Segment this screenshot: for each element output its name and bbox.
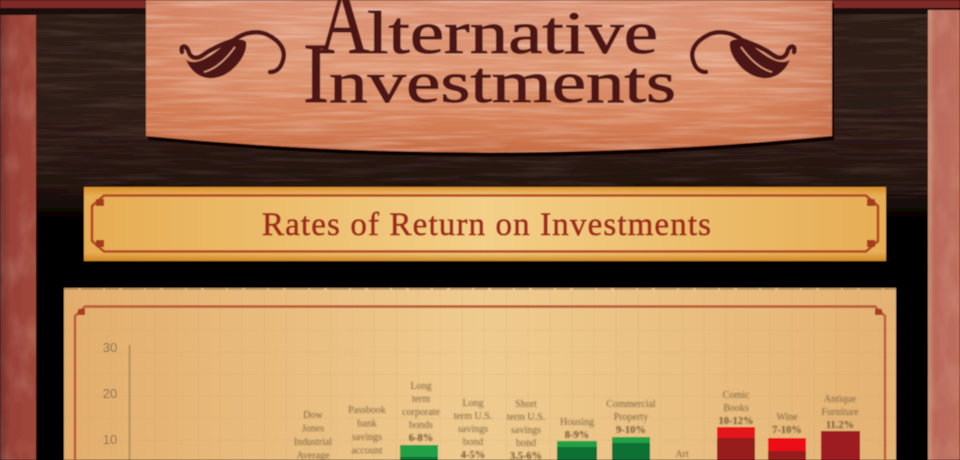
title: I	[303, 25, 329, 121]
panel: title plank	[146, 0, 834, 156]
label: Passbook: savings	[352, 432, 382, 443]
top beam	[0, 0, 960, 14]
label: short-term savings bond: savings	[511, 425, 541, 436]
icon: right flourish	[692, 32, 794, 78]
label: Passbook: Passbook	[348, 405, 386, 416]
label: corporate bonds: corporate	[402, 407, 440, 418]
label: corporate bonds: Long	[410, 381, 432, 392]
label: corporate bonds: 6-8%	[409, 433, 433, 444]
label: antique furniture: Antique	[824, 394, 857, 405]
title: lternative	[367, 0, 658, 66]
label: wine: 7-10%	[772, 425, 802, 436]
chart: y axis: 30	[103, 340, 117, 355]
label: comic books: Books	[723, 403, 749, 414]
label: corporate bonds: bonds	[409, 420, 433, 431]
bar: comic books	[717, 427, 755, 460]
label: antique furniture: Furniture	[821, 407, 859, 418]
label: short-term savings bond: Short	[515, 399, 537, 410]
chart: y axis	[103, 340, 130, 460]
label: commercial property: Property	[614, 412, 648, 423]
label: housing: 8-9%	[565, 430, 589, 441]
chart: y axis: 10	[103, 432, 117, 447]
label: commercial property: Commercial	[606, 399, 656, 410]
bar: commercial property	[612, 437, 650, 460]
bar chart: green and red bars	[400, 427, 860, 460]
title	[303, 0, 676, 121]
label: long-term savings bond: term U.S.	[454, 411, 492, 422]
banner inner border	[92, 196, 878, 252]
chart: y axis: 20	[103, 386, 117, 401]
section heading: Rates of Return on Investments	[262, 207, 711, 243]
label: Passbook: account	[351, 446, 383, 456]
label: Dow Jones: Industrial	[294, 437, 332, 448]
label: long-term savings bond: bond	[463, 437, 483, 448]
bar: corporate bonds	[400, 445, 438, 460]
label: comic books: 10-12%	[718, 416, 754, 427]
label: long-term savings bond: Long	[462, 398, 484, 409]
background: dark wood wall	[36, 8, 928, 216]
label: art: Art	[675, 449, 689, 460]
label: comic books: Comic	[723, 390, 750, 401]
label: short-term savings bond: bond	[516, 438, 536, 449]
icon: left flourish	[182, 32, 284, 78]
bar labels	[294, 381, 859, 460]
label: commercial property: 9-10%	[616, 425, 646, 436]
label: long-term savings bond: savings	[458, 424, 488, 435]
panel: chart parchment	[64, 288, 896, 460]
label: housing: Housing	[560, 417, 594, 428]
left pillar	[0, 15, 36, 460]
label: Passbook: bank	[357, 418, 377, 430]
panel: section banner	[84, 187, 886, 261]
bar: antique furniture	[821, 431, 860, 460]
label: wine: Wine	[776, 412, 798, 423]
label: antique furniture: 11.2%	[826, 420, 854, 431]
title: nvestments	[329, 50, 676, 115]
label: short-term savings bond: term U.S.	[507, 412, 545, 423]
right pillar	[928, 10, 960, 460]
bar: housing	[557, 441, 597, 460]
bar: wine	[768, 438, 806, 460]
label: Dow Jones: Jones	[302, 424, 324, 434]
parchment border	[75, 306, 885, 460]
label: Dow Jones: Dow	[303, 410, 323, 421]
label: corporate bonds: term	[412, 394, 430, 405]
